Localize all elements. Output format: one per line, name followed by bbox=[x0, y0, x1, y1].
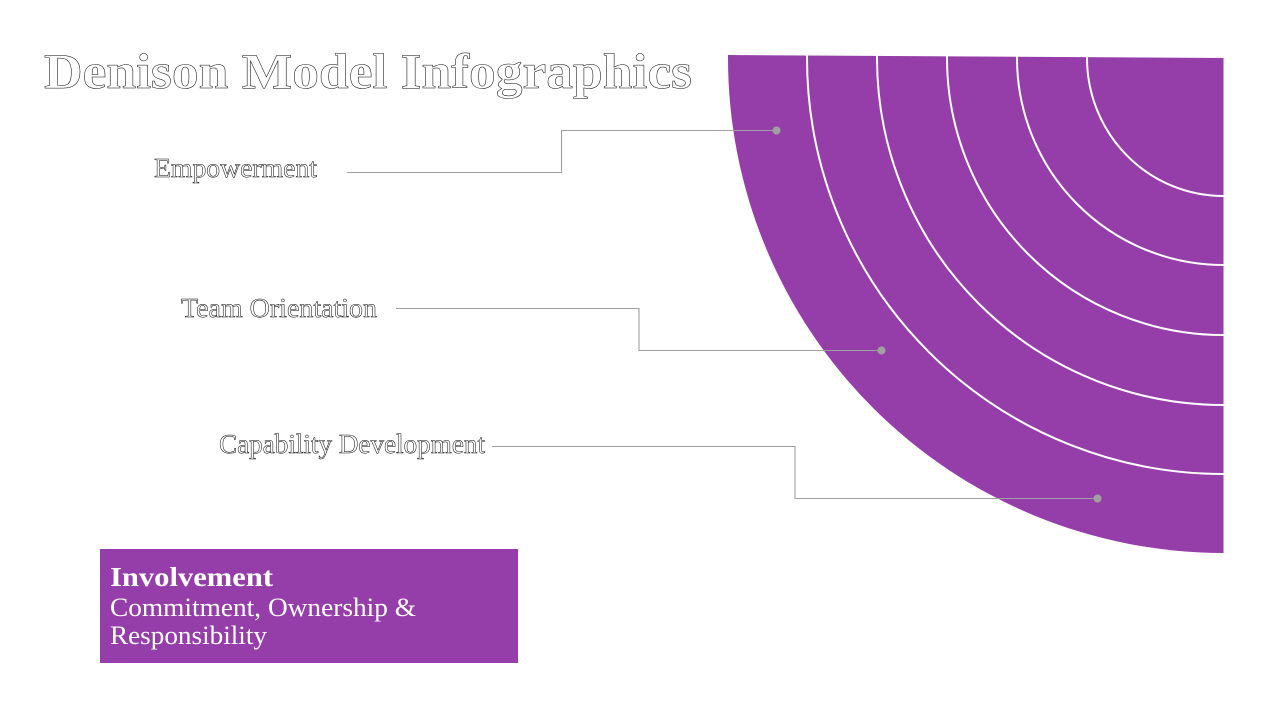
ring divider 2 bbox=[877, 55, 1224, 405]
label: Empowerment: Empowerment bbox=[154, 153, 317, 183]
connector: Empowerment bbox=[347, 126, 780, 172]
ring divider 3 bbox=[947, 55, 1224, 335]
connector: Team Orientation bbox=[396, 308, 886, 354]
ring divider 1 bbox=[807, 55, 1224, 474]
callout text line 2: Responsibility bbox=[110, 621, 267, 650]
outer purple quarter circle bbox=[728, 55, 1224, 553]
label: Team Orientation: Team Orientation bbox=[181, 293, 378, 323]
ring divider 4 bbox=[1017, 55, 1224, 265]
title: Denison Model Infographics bbox=[44, 43, 692, 99]
callout text line 1: Commitment, Ownership & bbox=[110, 593, 416, 622]
chart: concentric quarter-circle rings bbox=[728, 55, 1224, 553]
connector: Capability Development bbox=[492, 446, 1102, 502]
callout: Involvement bbox=[100, 549, 518, 663]
ring divider 5 bbox=[1087, 55, 1224, 196]
callout background bbox=[100, 549, 518, 663]
label: Capability Development: Capability Development bbox=[219, 429, 486, 459]
callout heading: Involvement bbox=[110, 562, 273, 592]
